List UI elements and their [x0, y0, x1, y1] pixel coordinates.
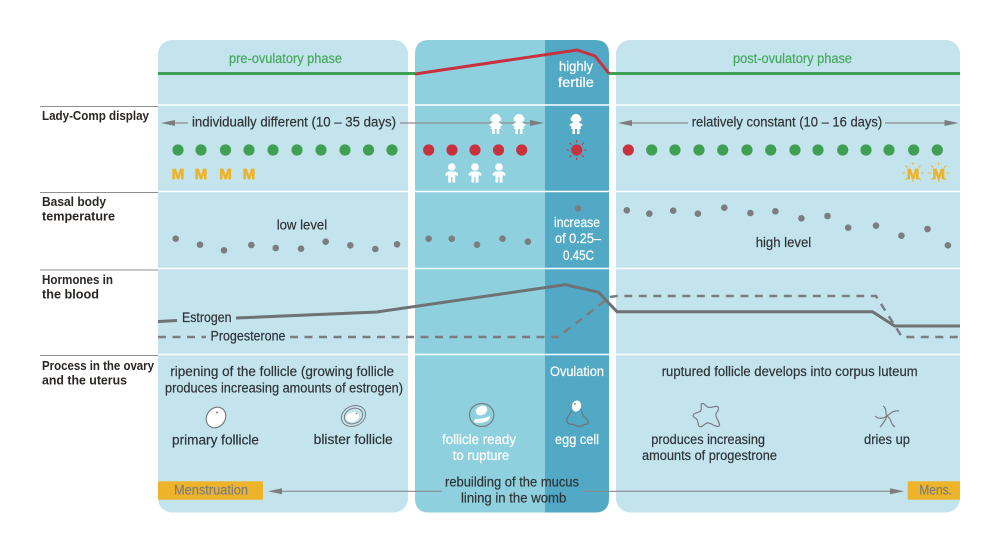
panel: highly fertile band: [545, 40, 609, 512]
row label: Basal body temperature: [42, 194, 115, 224]
menstruation markers with rays: M: [907, 166, 919, 183]
hormone chart: estrogen line: [158, 285, 960, 326]
display dots: post-ovulatory: [623, 144, 943, 156]
menstruation markers with rays: M: [932, 166, 945, 183]
bar: Menstruation: [158, 481, 263, 500]
display dots: pre-ovulatory green: [172, 144, 398, 156]
text: ripening of the follicle: produces increasing amounts of estrogen): [165, 380, 403, 395]
temperature dots: high level: [624, 204, 951, 249]
icon: follicle ready to rupture: [470, 404, 494, 426]
heading: Ovulation: Ovulation: [550, 364, 604, 379]
panel: post-ovulatory phase: [616, 40, 960, 512]
menstruation markers: M: [172, 166, 184, 183]
text: rebuilding of the mucus lining: lining in the womb: [461, 491, 566, 506]
bar: Mens.: [908, 481, 960, 500]
temperature label: high level: high level: [756, 235, 811, 250]
menstruation markers with rays: [902, 162, 949, 183]
label: increase of temperature: [554, 215, 601, 263]
row label: Process in the ovary and the uterus: [42, 358, 155, 388]
duration arrow: individually different: [161, 114, 544, 130]
temperature label: low level: low level: [277, 218, 327, 232]
hormone chart: progesterone dashed line: Progesterone: [210, 328, 286, 344]
menstruation markers: M: [219, 166, 232, 183]
label: increase of temperature: 0.45C: [563, 248, 594, 263]
icon: corpus luteum star: [693, 403, 720, 427]
row label: Process in the ovary and the uterus: and the uterus: [42, 372, 127, 388]
label: produces increasing amounts of progestrone: amounts of progestrone: [642, 448, 777, 463]
row label: Lady-Comp display: Lady-Comp display: [42, 108, 150, 123]
bar: Menstruation: Menstruation: [174, 482, 248, 498]
row label: Hormones in the blood: [42, 272, 113, 302]
row label: Basal body temperature: temperature: [42, 208, 115, 224]
label: produces increasing amounts of progestrone: produces increasing: [651, 432, 765, 447]
icon: dried corpus luteum: [875, 406, 899, 427]
label: follicle ready to rupture: [442, 432, 516, 463]
hormone chart: estrogen line: Estrogen: [182, 310, 232, 325]
text: ripening of the follicle: ripening of the follicle (growing follicle: [170, 364, 394, 379]
row label: Process in the ovary and the uterus: Process in the ovary: [42, 358, 155, 373]
phase line: green and red fertility curve: [158, 50, 960, 74]
icons: boy figures: [445, 163, 506, 182]
label: primary follicle: primary follicle: [172, 432, 259, 447]
panel: pre-ovulatory phase: [158, 40, 408, 512]
label: increase of temperature: of 0.25–: [555, 231, 601, 246]
menstruation markers: M: [243, 166, 255, 183]
label: highly fertile: highly: [559, 59, 593, 74]
heading: pre-ovulatory phase: pre-ovulatory phase: [229, 51, 342, 66]
icon: blister follicle: [338, 402, 369, 430]
label: increase of temperature: increase: [554, 215, 600, 230]
heading: post-ovulatory phase: post-ovulatory phase: [733, 51, 852, 66]
label: dries up: dries up: [864, 432, 910, 447]
icon: red sun ovulation day: [567, 140, 587, 160]
panel: ovulatory window: [415, 40, 609, 512]
label: egg cell: egg cell: [555, 432, 599, 447]
duration arrow: individually different: individually different (10 – 35 days): [192, 114, 396, 130]
label: follicle ready to rupture: to rupture: [453, 448, 509, 463]
arrow: rebuilding span: [268, 488, 904, 494]
text: ruptured follicle: ruptured follicle develops into corpus luteum: [662, 364, 918, 379]
label: highly fertile: fertile: [558, 75, 594, 90]
menstruation markers: M: [195, 166, 207, 183]
row label: Hormones in the blood: the blood: [42, 286, 99, 302]
menstruation markers: [172, 166, 255, 183]
hormone chart: progesterone dashed line: [158, 296, 960, 344]
text: rebuilding of the mucus lining: [445, 475, 579, 506]
text: ripening of the follicle: [165, 364, 403, 395]
text: rebuilding of the mucus lining: rebuilding of the mucus: [445, 475, 579, 490]
icon: egg cell: [567, 399, 588, 426]
duration arrow: relatively constant: relatively constant (10 – 16 days): [692, 114, 882, 130]
duration arrow: relatively constant: [618, 114, 958, 130]
icons: girl figures: [489, 114, 583, 134]
display dots: fertile red: [423, 144, 527, 156]
row label: Basal body temperature: Basal body: [42, 194, 107, 209]
bar: Mens.: Mens.: [919, 482, 952, 498]
row label: Hormones in the blood: Hormones in: [42, 272, 113, 287]
label: follicle ready to rupture: follicle ready: [442, 432, 516, 447]
label: blister follicle: blister follicle: [314, 432, 393, 447]
temperature dots: low level: [172, 235, 531, 254]
icon: primary follicle: [202, 403, 230, 432]
temperature dot: ovulation rise: [575, 205, 581, 212]
label: highly fertile: [558, 59, 594, 90]
label: produces increasing amounts of progestrone: [642, 432, 777, 463]
